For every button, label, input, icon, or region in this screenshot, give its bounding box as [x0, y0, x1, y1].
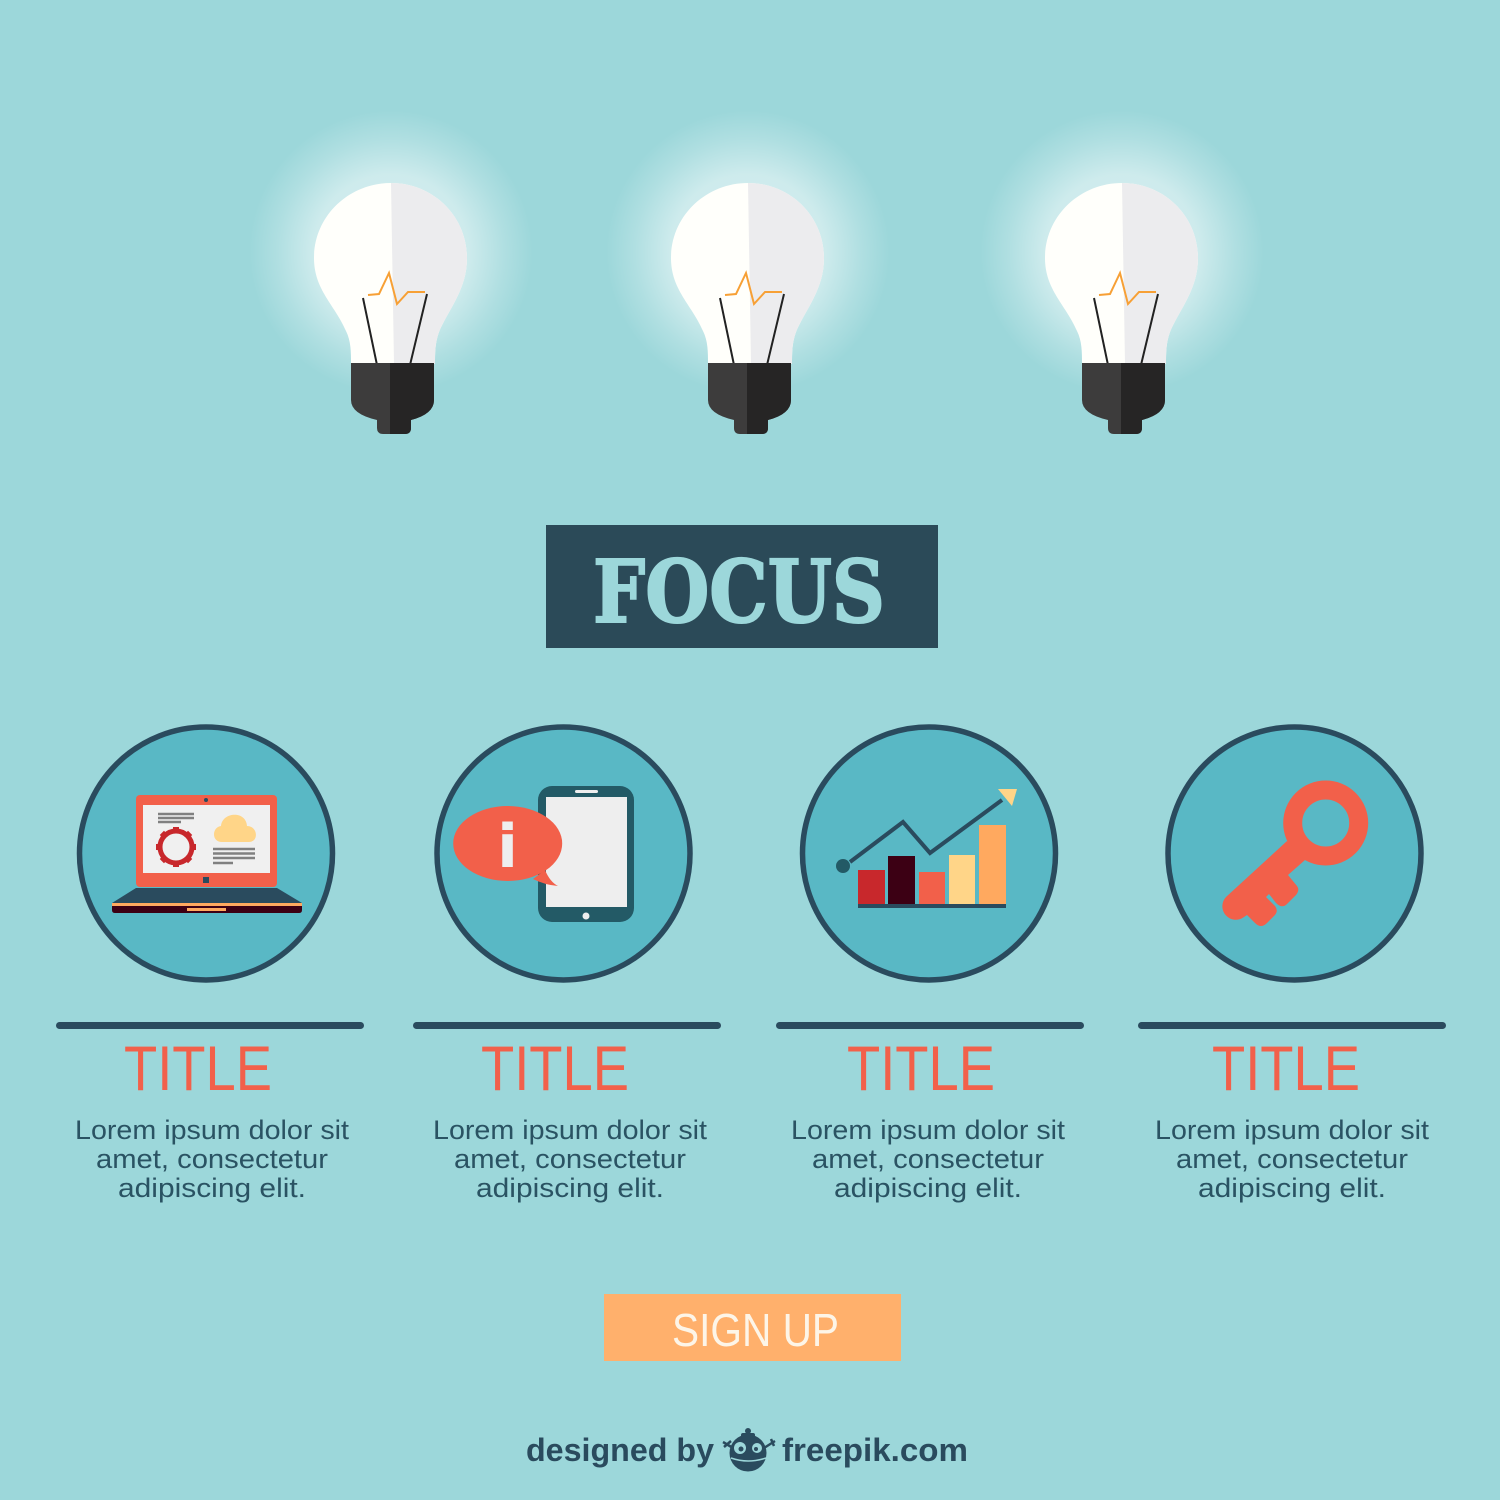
description 1: adipiscing elit. [118, 1173, 306, 1203]
icon: freepik mascot [723, 1428, 775, 1472]
filament [368, 273, 425, 304]
column 3 text [776, 1022, 1084, 1203]
icon circle [802, 727, 1056, 980]
icon: laptop [112, 795, 302, 913]
banner title: FOCUS [593, 542, 885, 643]
description 4: Lorem ipsum dolor sit [1155, 1115, 1430, 1145]
column 2 text [413, 1022, 721, 1203]
light bulb 3 [980, 110, 1264, 434]
sign up button [604, 1294, 901, 1361]
light bulb 2 [606, 110, 890, 434]
description 3: adipiscing elit. [834, 1173, 1022, 1203]
glass shade [391, 183, 467, 364]
description 2: Lorem ipsum dolor sit [433, 1115, 708, 1145]
glow [249, 110, 533, 394]
base shade [390, 363, 434, 434]
banner background [546, 525, 938, 648]
glow [980, 110, 1264, 394]
description 4: adipiscing elit. [1198, 1173, 1386, 1203]
wires [1094, 294, 1158, 365]
light bulb 1 [249, 110, 533, 434]
glass [671, 183, 824, 364]
glass shade [1122, 183, 1198, 364]
base shade [1121, 363, 1165, 434]
icon: info speech bubble: i [497, 812, 518, 882]
base shade [747, 363, 791, 434]
icon: bar chart [858, 825, 1006, 908]
heading: FOCUS banner [546, 525, 938, 648]
base [1082, 363, 1165, 434]
credit text left: designed by [526, 1432, 714, 1468]
icon: trend arrow [836, 789, 1017, 873]
title 4: TITLE [1212, 1034, 1360, 1104]
title 2: TITLE [481, 1034, 629, 1104]
footer credit [526, 1428, 968, 1472]
sign up button: SIGN UP [672, 1304, 839, 1356]
panel: phone [437, 727, 690, 980]
glow [606, 110, 890, 394]
icon: smartphone [538, 786, 634, 922]
panel: laptop [80, 727, 332, 980]
filament [725, 273, 782, 304]
title 1: TITLE [124, 1034, 272, 1104]
description 4: amet, consectetur [1176, 1144, 1408, 1174]
panel: key [1168, 727, 1421, 980]
title 3: TITLE [847, 1034, 995, 1104]
column 1 text [56, 1022, 364, 1203]
icon circle [1168, 727, 1421, 980]
credit text right: freepik.com [782, 1432, 968, 1468]
panel: chart [802, 727, 1056, 980]
description 2: amet, consectetur [454, 1144, 686, 1174]
column 4 text [1138, 1022, 1446, 1203]
filament [1099, 273, 1156, 304]
wires [363, 294, 427, 365]
description 1: amet, consectetur [96, 1144, 328, 1174]
base [708, 363, 791, 434]
description 2: adipiscing elit. [476, 1173, 664, 1203]
glass [314, 183, 467, 364]
description 3: Lorem ipsum dolor sit [791, 1115, 1066, 1145]
glass [1045, 183, 1198, 364]
glass shade [748, 183, 824, 364]
wires [720, 294, 784, 365]
icon circle [80, 727, 332, 980]
icon: info speech bubble [453, 806, 562, 886]
base [351, 363, 434, 434]
description 3: amet, consectetur [812, 1144, 1044, 1174]
icon: key [1222, 790, 1359, 926]
icon circle [437, 727, 690, 980]
description 1: Lorem ipsum dolor sit [75, 1115, 350, 1145]
